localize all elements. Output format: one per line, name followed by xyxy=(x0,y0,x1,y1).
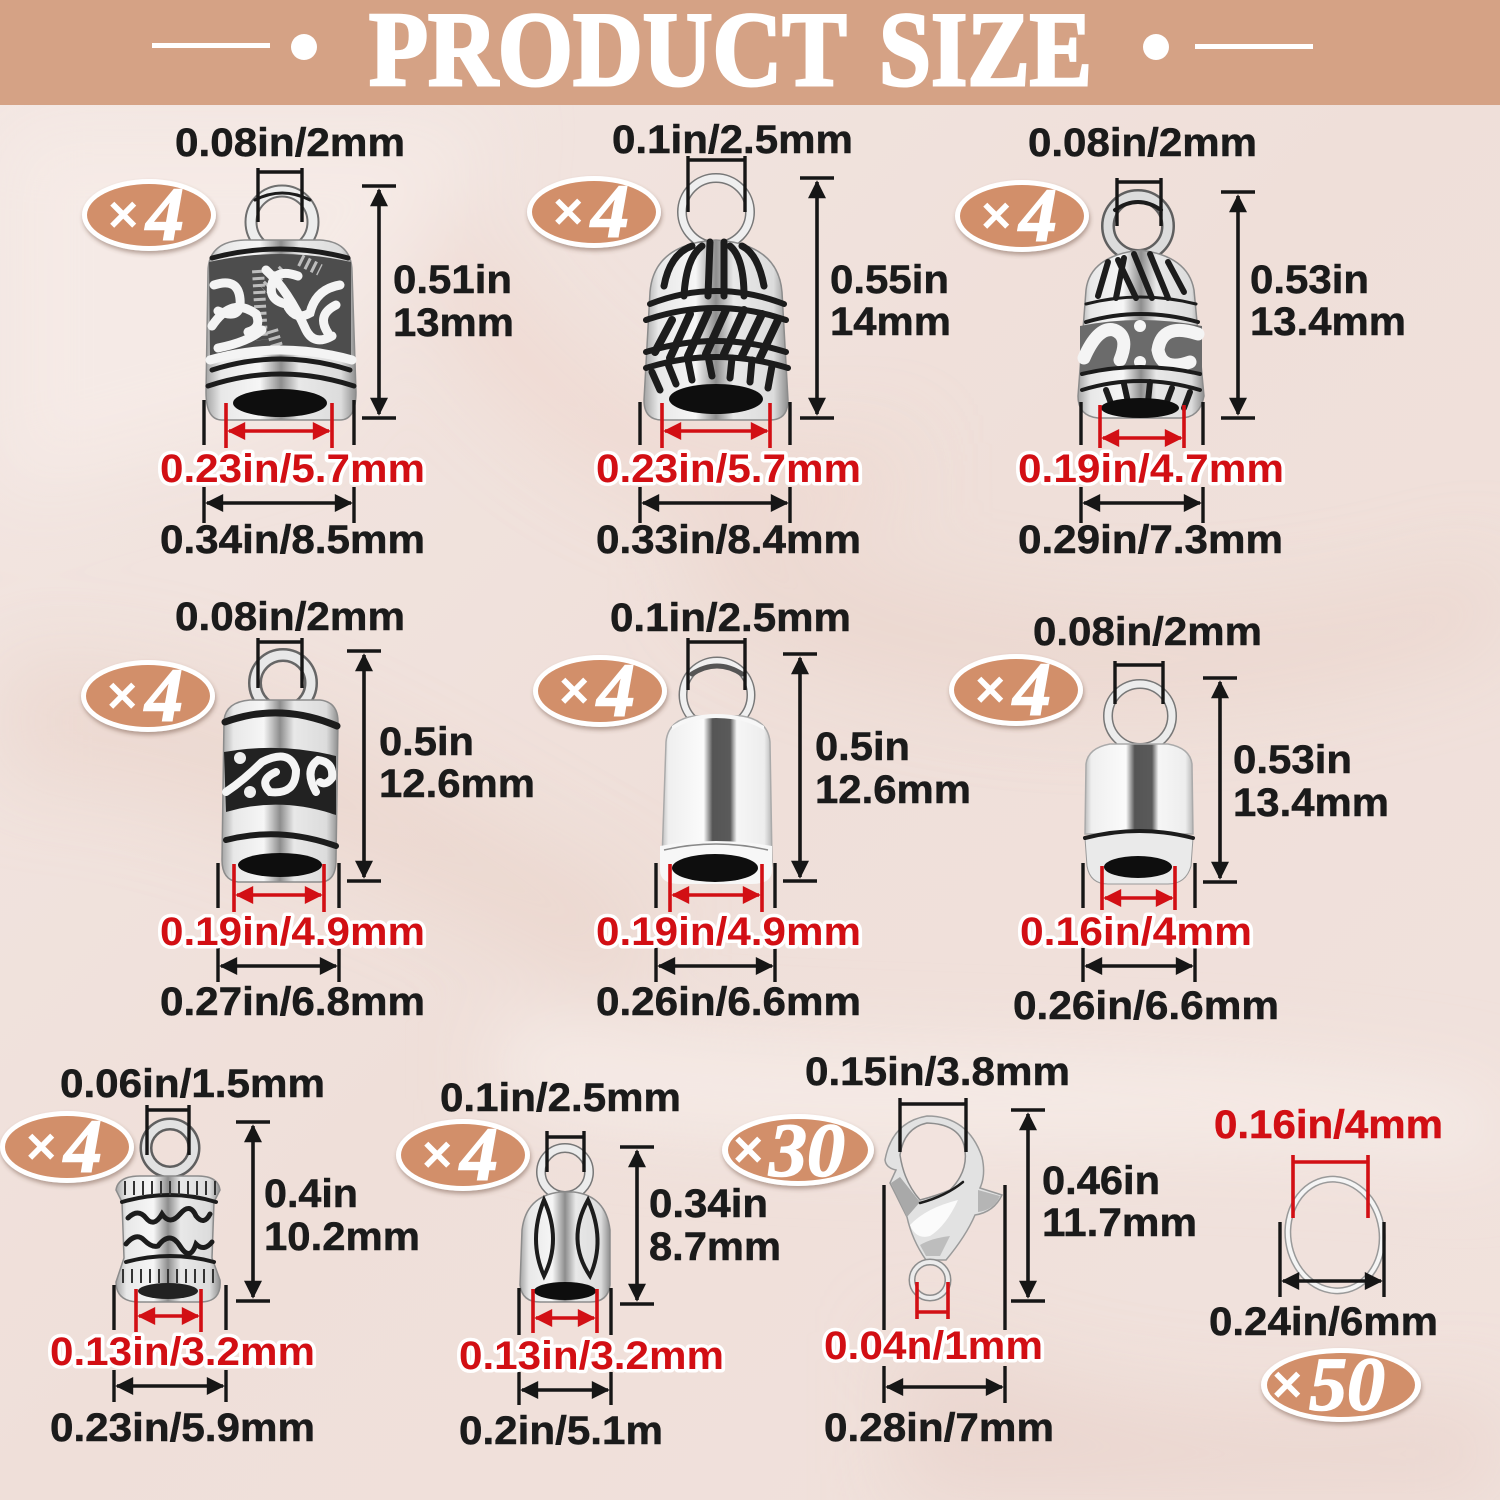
quantity tag xyxy=(955,174,1089,258)
quantity tag: 4 xyxy=(595,649,635,733)
size labels xyxy=(1018,121,1406,562)
size labels: 0.55in xyxy=(830,258,949,302)
clasp illustration xyxy=(885,1116,1002,1298)
size labels: 0.34in/8.5mm xyxy=(160,518,425,562)
size labels: 0.19in/4.9mm xyxy=(160,910,425,954)
dimension lines xyxy=(656,638,817,982)
item 5: plain tall cap xyxy=(533,596,971,1024)
size labels: 0.15in/3.8mm xyxy=(805,1050,1070,1094)
size labels: 0.08in/2mm xyxy=(175,121,405,165)
size labels: 0.4in xyxy=(264,1172,358,1216)
size labels: 0.23in/5.9mm xyxy=(50,1406,315,1450)
size labels: 0.13in/3.2mm xyxy=(50,1330,315,1374)
size labels: 0.53in xyxy=(1250,258,1369,302)
size labels: 0.29in/7.3mm xyxy=(1018,518,1283,562)
quantity tag: 4 xyxy=(458,1113,498,1197)
item 8: petal cap xyxy=(396,1076,781,1453)
size labels: 0.16in/4mm xyxy=(1020,910,1252,954)
dimension lines xyxy=(218,638,381,982)
quantity tag xyxy=(533,649,667,733)
size labels: 0.06in/1.5mm xyxy=(60,1062,325,1106)
cap illustration xyxy=(222,655,338,882)
item 1: patterned cord end cap xyxy=(82,121,514,562)
size labels: 0.26in/6.6mm xyxy=(1013,984,1279,1028)
size labels xyxy=(596,118,951,562)
quantity tag xyxy=(527,170,661,254)
item 4: swirl band cap xyxy=(81,595,535,1024)
size labels xyxy=(160,595,535,1024)
dimension lines xyxy=(114,1105,270,1402)
quantity tag xyxy=(81,654,215,738)
size labels: 0.24in/6mm xyxy=(1209,1300,1438,1344)
size labels: 11.7mm xyxy=(1042,1201,1197,1245)
quantity tag: × xyxy=(975,661,1005,719)
quantity tag: 4 xyxy=(1011,648,1051,732)
dimension lines xyxy=(204,168,396,523)
size labels: 0.23in/5.7mm xyxy=(160,447,425,491)
quantity tag: × xyxy=(553,183,583,241)
quantity tag: × xyxy=(26,1118,56,1176)
size labels: 0.26in/6.6mm xyxy=(596,980,861,1024)
size labels: 0.19in/4.9mm xyxy=(596,910,861,954)
quantity tag: × xyxy=(733,1121,763,1179)
quantity tag xyxy=(722,1109,874,1193)
quantity tag: 4 xyxy=(62,1105,102,1189)
item 7: flared patterned cap xyxy=(0,1062,420,1450)
size labels xyxy=(596,596,971,1024)
item 10: jump ring xyxy=(1209,1103,1443,1427)
size labels: 0.34in xyxy=(649,1182,768,1226)
size labels xyxy=(1209,1103,1443,1344)
quantity tag: × xyxy=(981,187,1011,245)
quantity tag xyxy=(949,648,1083,732)
size labels: 13mm xyxy=(393,301,514,345)
size labels: 0.46in xyxy=(1042,1159,1160,1203)
quantity tag: 4 xyxy=(143,654,183,738)
size labels: 0.19in/4.7mm xyxy=(1018,447,1284,491)
cap illustration xyxy=(644,178,788,420)
size labels: 0.08in/2mm xyxy=(175,595,405,639)
cap illustration xyxy=(520,1148,610,1302)
dimension lines xyxy=(1081,178,1255,523)
dimension lines xyxy=(519,1131,654,1405)
size labels xyxy=(1013,610,1389,1028)
quantity tag xyxy=(0,1105,134,1189)
dimension lines xyxy=(1083,661,1237,982)
size labels: 12.6mm xyxy=(815,768,971,812)
size labels: 0.33in/8.4mm xyxy=(596,518,861,562)
size labels: 12.6mm xyxy=(379,762,535,806)
quantity tag: × xyxy=(422,1126,452,1184)
size labels: 0.28in/7mm xyxy=(824,1406,1054,1450)
size labels: 0.51in xyxy=(393,258,512,302)
size labels: 0.5in xyxy=(379,720,474,764)
size labels: 0.53in xyxy=(1233,738,1352,782)
dimension lines xyxy=(1280,1155,1384,1297)
size labels: 0.1in/2.5mm xyxy=(610,596,851,640)
size labels xyxy=(805,1050,1197,1450)
size labels: 13.4mm xyxy=(1250,300,1406,344)
cap illustration xyxy=(1078,196,1204,418)
size labels: 10.2mm xyxy=(264,1215,420,1259)
quantity tag: × xyxy=(107,667,137,725)
quantity tag: 4 xyxy=(1017,174,1057,258)
quantity tag: 50 xyxy=(1309,1343,1385,1427)
size labels: 0.08in/2mm xyxy=(1033,610,1262,654)
quantity tag xyxy=(1261,1343,1421,1427)
quantity tag: 30 xyxy=(768,1109,845,1193)
dimension lines xyxy=(884,1098,1045,1403)
cap illustration xyxy=(660,661,772,884)
size labels: 0.08in/2mm xyxy=(1028,121,1257,165)
size labels: 0.1in/2.5mm xyxy=(440,1076,681,1120)
cap illustration xyxy=(1085,684,1193,884)
title banner xyxy=(0,0,1500,108)
size labels xyxy=(440,1076,781,1453)
size labels: 0.5in xyxy=(815,725,910,769)
size labels xyxy=(160,121,514,562)
size labels: 0.1in/2.5mm xyxy=(612,118,853,162)
item 3: twisted pattern cap xyxy=(955,121,1406,562)
size labels: 13.4mm xyxy=(1233,781,1389,825)
size labels: 0.2in/5.1m xyxy=(459,1409,663,1453)
size labels: 0.13in/3.2mm xyxy=(459,1334,724,1378)
item 2: ribbed dome cap xyxy=(527,118,951,562)
item 6: plain short cap xyxy=(949,610,1389,1028)
ring illustration xyxy=(1281,1173,1389,1297)
cap illustration xyxy=(116,1124,220,1302)
size labels: 0.27in/6.8mm xyxy=(160,980,425,1024)
size labels: 0.16in/4mm xyxy=(1214,1103,1443,1147)
dimension lines xyxy=(640,156,834,523)
quantity tag: 4 xyxy=(144,173,184,257)
size labels: 0.04n/1mm xyxy=(824,1324,1043,1368)
cap illustration xyxy=(206,191,356,420)
quantity tag: × xyxy=(1272,1356,1302,1414)
quantity tag: 4 xyxy=(589,170,629,254)
item 9: lobster clasp xyxy=(722,1050,1197,1450)
quantity tag: × xyxy=(559,662,589,720)
size labels: 8.7mm xyxy=(649,1225,781,1269)
size labels xyxy=(50,1062,420,1450)
quantity tag xyxy=(396,1113,530,1197)
size labels: 14mm xyxy=(830,300,951,344)
size labels: 0.23in/5.7mm xyxy=(596,447,861,491)
quantity tag: × xyxy=(108,186,138,244)
quantity tag xyxy=(82,173,216,257)
